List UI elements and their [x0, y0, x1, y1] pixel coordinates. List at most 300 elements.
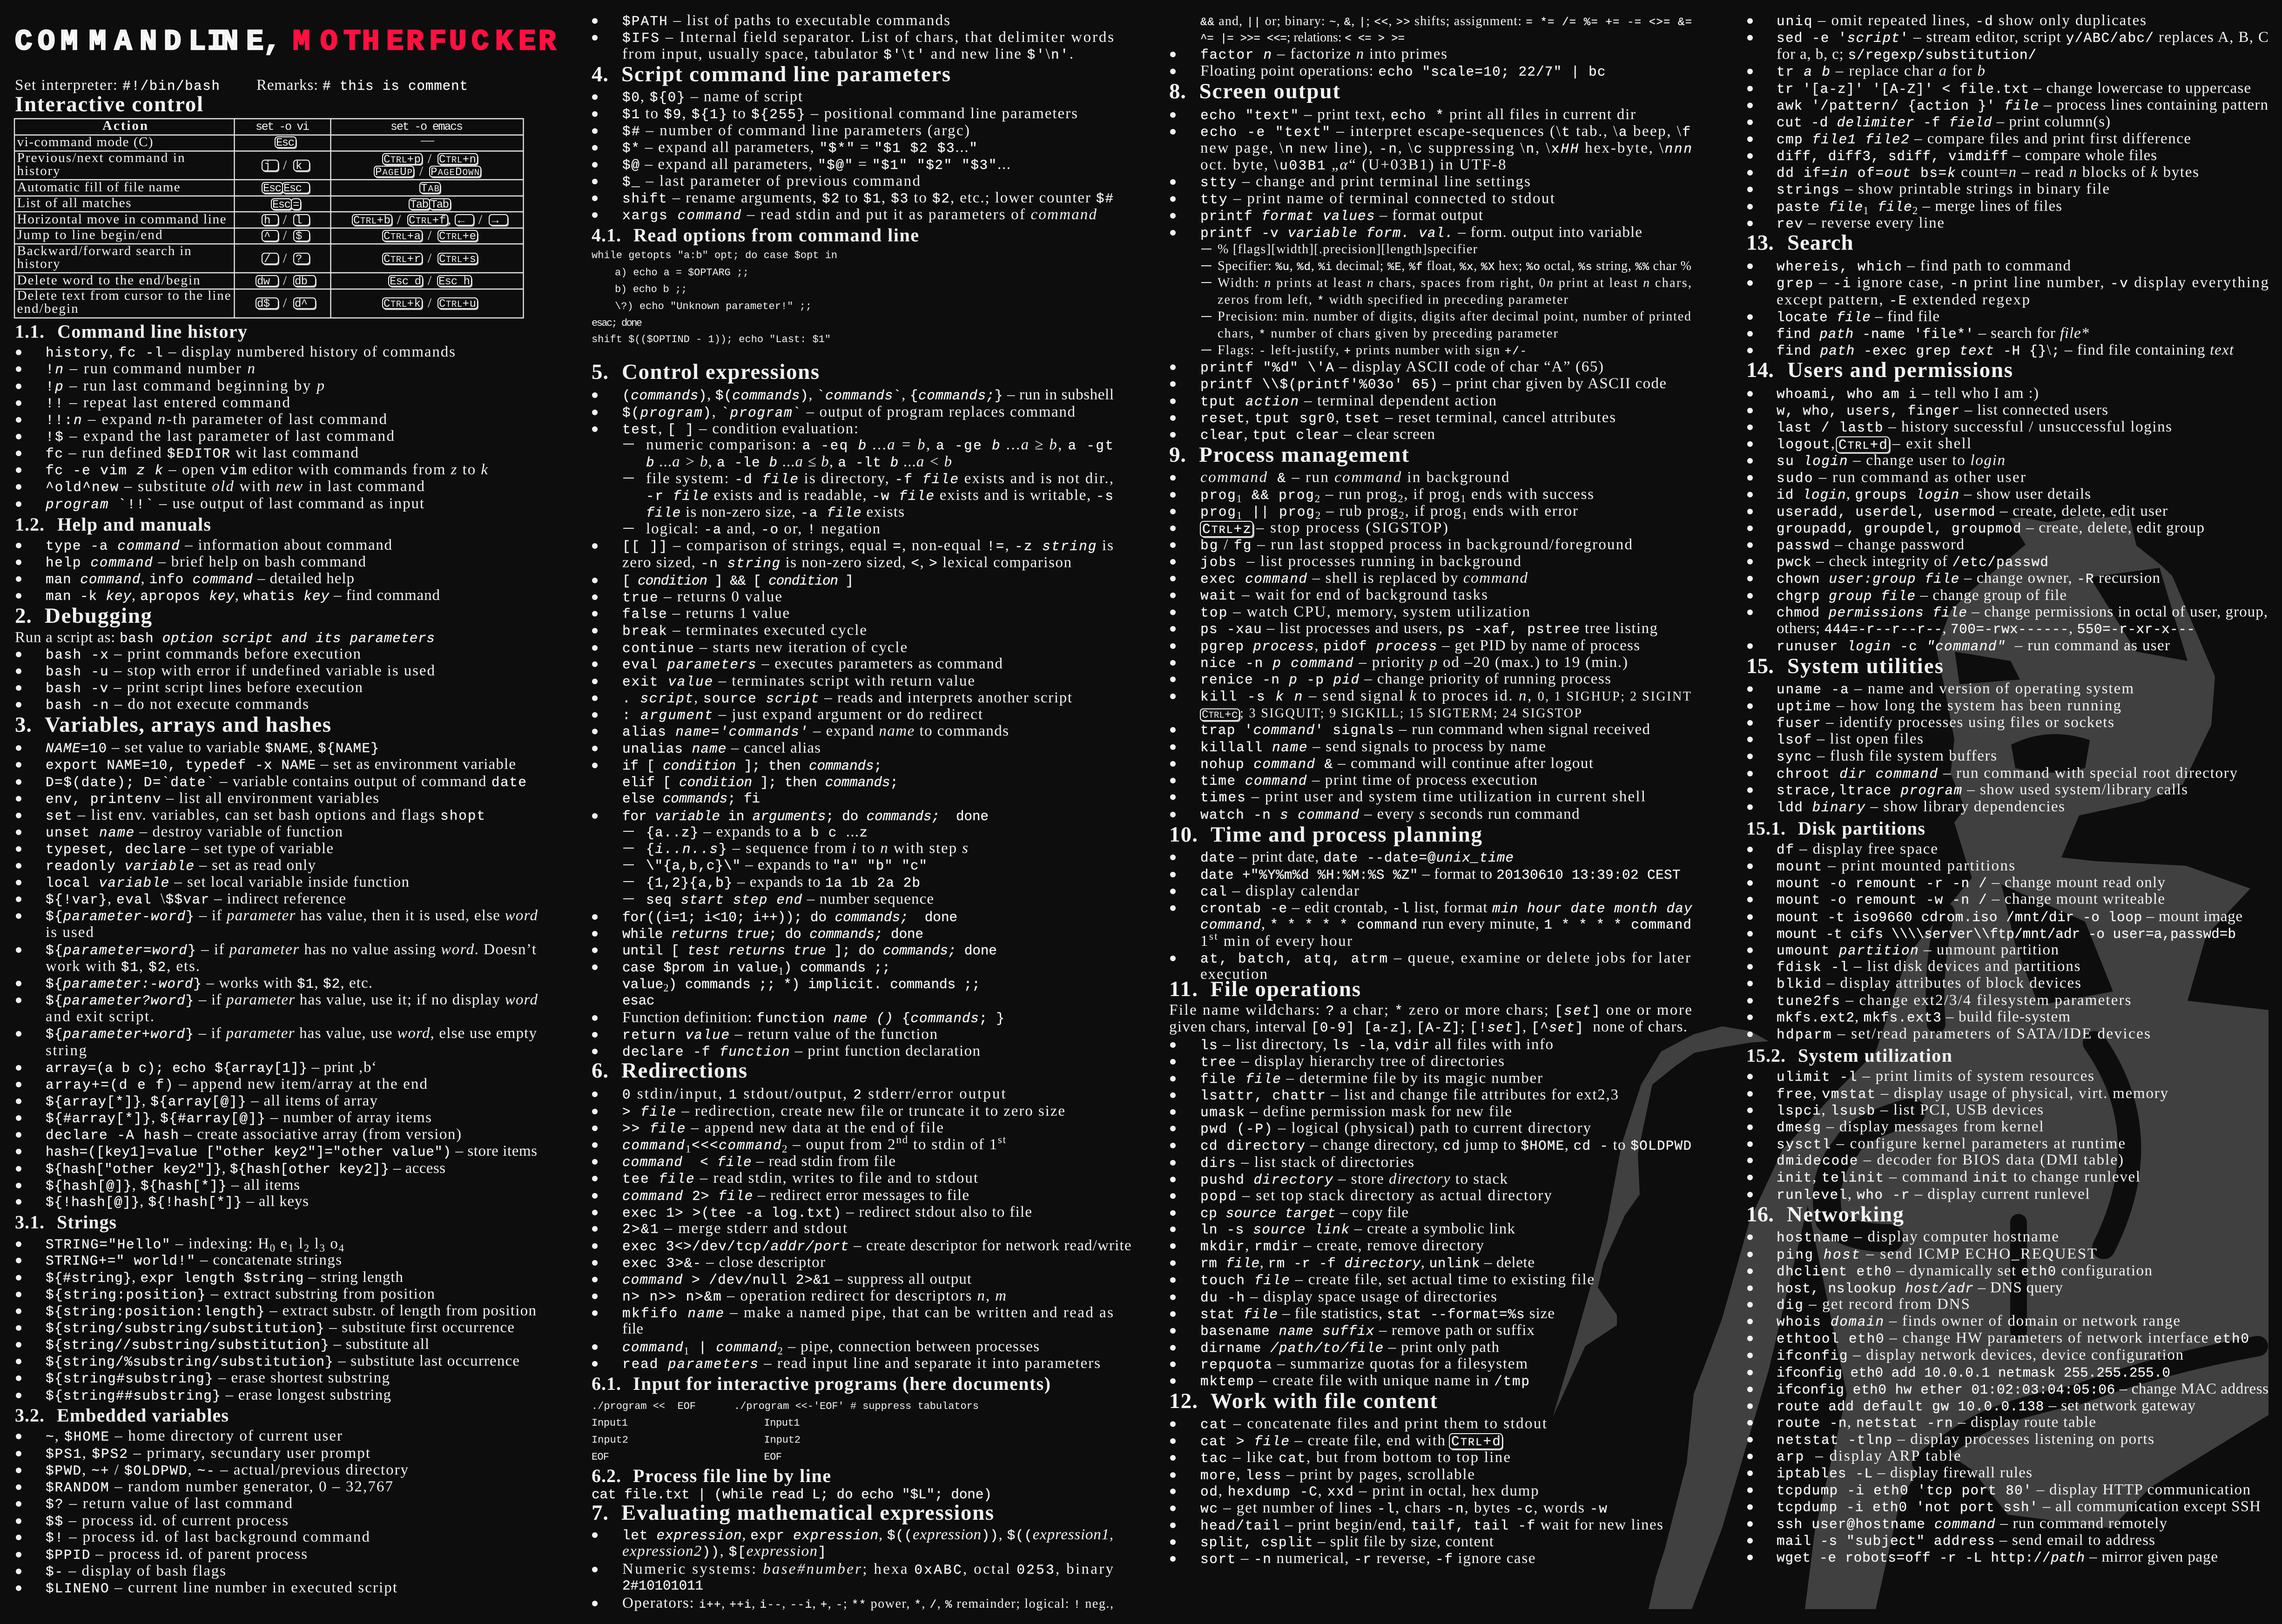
list: control expressions: case $prom in value1) commands ;; — [622, 960, 890, 977]
table: interactive control keys: vi-command mode (C) — [17, 135, 153, 149]
list: file operations: basename name suffix – remove path or suffix — [1200, 1322, 1535, 1339]
list: redirections: n> n>> n>&m – operation redirect for descriptors n, m — [622, 1287, 1006, 1305]
list: screen output: reset, tput sgr0, tset – reset terminal, cancel attributes — [1200, 409, 1616, 426]
list: system utilization: sysctl – configure kernel parameters at runtime — [1777, 1135, 2125, 1152]
list: variables: ${hash["other key2"]}, ${hash[other key2]} – access — [46, 1160, 445, 1177]
list: file content continued: tr a b – replace char a for b — [1777, 62, 1985, 80]
list: math expressions — [592, 1526, 1113, 1611]
list: help commands — [16, 537, 440, 604]
list: file content continued: awk '/pattern/ {action }' file – process lines containing pattern — [1777, 97, 2268, 114]
list: system utilization: init, telinit – command init to change runlevel — [1777, 1169, 2140, 1186]
table: interactive control keys: history — [17, 256, 60, 271]
list: users: passwd – change password — [1777, 536, 1964, 553]
list: screen output: printf \\$(printf'%03o' 65) – print char given by ASCII code — [1200, 375, 1666, 392]
list: embedded variables continued: $IFS – Internal field separator. List of chars, that delimiter words — [622, 29, 1114, 46]
list: embedded variables: $? – return value of last command — [46, 1495, 292, 1512]
list: system utilization: ulimit -l – print limits of system resources — [1777, 1068, 2094, 1085]
code block: getopts — [592, 250, 837, 345]
list: screen output: printf format values – format output — [1200, 207, 1483, 224]
list: file content continued: diff, diff3, sdiff, vimdiff – compare whole files — [1777, 147, 2157, 164]
code block: here documents: ./program <<-'EOF' # suppress tabulators — [734, 1401, 979, 1412]
column 4 — [1746, 12, 2269, 1566]
heading 3.1 — [15, 1212, 116, 1233]
list: system utilities: chroot dir command – run command with special root directory — [1777, 765, 2238, 782]
list: process management: bg / fg – run last stopped process in background/foreground — [1200, 536, 1633, 553]
section 15.1 disk partitions — [1746, 818, 2242, 1043]
list: process management: trap 'command' signals – run command when signal received — [1200, 721, 1650, 738]
list: search: find path -name 'file*' – search for file* — [1777, 325, 2089, 342]
list: redirections: > file – redirection, create new file or truncate it to zero size — [622, 1103, 1065, 1120]
list: redirections: exec 3>&- – close descriptor — [622, 1254, 825, 1271]
section 3.1 strings — [15, 1212, 536, 1404]
list: process management: exec command – shell is replaced by command — [1200, 570, 1528, 587]
table: interactive control keys: Jump to line begin/end — [17, 227, 162, 242]
list: users: w, who, users, finger – list connected users — [1777, 402, 2108, 419]
list: networking — [1747, 1228, 2269, 1566]
list: networking: wget -e robots=off -r -L http://path – mirror given page — [1777, 1549, 2218, 1566]
table: interactive control keys: Esc — [283, 182, 302, 195]
heading 7: 7. — [592, 1501, 608, 1525]
heading 6.2: 6.2. — [592, 1465, 621, 1486]
table: interactive control keys: CTRL+n — [439, 154, 476, 166]
list: help commands: type -a command – information about command — [46, 537, 392, 554]
table: interactive control keys: Automatic fill of file name — [17, 180, 180, 195]
list: process management: ps -xau – list processes and users, ps -xaf, pstree tree listing — [1200, 620, 1657, 637]
list: planning: date – print date, date --date=@unix_time — [1200, 849, 1514, 866]
table: interactive control keys: PAGEDOWN — [431, 166, 479, 179]
list: process management: CTRL+c — [1202, 709, 1238, 721]
interpreter and remarks line: Set interpreter: #!/bin/bash — [15, 77, 220, 94]
list: screen output: chars, * number of chars given by preceding parameter — [1218, 326, 1558, 341]
list: file content: split, csplit – split file by size, content — [1200, 1533, 1494, 1550]
heading 12: 12. — [1169, 1389, 1198, 1413]
list: redirections: exec 1> >(tee -a log.txt) – redirect stdout also to file — [622, 1204, 1032, 1221]
table: interactive control keys: Esc — [263, 182, 282, 195]
list: control expressions: else commands; fi — [622, 791, 760, 807]
list: screen output: printf "%d" \'A – display ASCII code of char “A” (65) — [1200, 358, 1603, 376]
code block: here documents: Input1 — [592, 1417, 628, 1429]
list: networking: tcpdump -i eth0 'tcp port 80' – display HTTP communication — [1777, 1481, 2250, 1499]
list: file operations: repquota – summarize quotas for a filesystem — [1200, 1355, 1528, 1373]
list: networking: dig – get record from DNS — [1777, 1296, 1970, 1313]
list: math expressions continued — [1170, 14, 1692, 80]
heading 10: 10. — [1169, 822, 1198, 847]
list: history commands: !p – run last command beginning by p — [46, 377, 324, 395]
list: system utilization — [1747, 1068, 2168, 1203]
list: users: CTRL+d — [1838, 438, 1887, 453]
list: file content: head/tail – print begin/end, tailf, tail -f wait for new lines — [1200, 1516, 1663, 1534]
list: embedded variables continued: from input, usually space, tabulator $'\t' and new line $'\n'. — [622, 46, 1073, 63]
list: file content: sort – -n numerical, -r reverse, -f ignore case — [1200, 1550, 1535, 1567]
list: planning: command, * * * * * command run every minute, 1 * * * * command — [1200, 916, 1691, 933]
table: interactive control keys: ^ — [264, 230, 270, 243]
section 4.1 read options — [592, 224, 919, 345]
list: file content continued: cmp file1 file2 – compare files and print first difference — [1777, 130, 2191, 148]
list: embedded variables continued: $PATH – list of paths to executable commands — [622, 12, 950, 29]
list: users: chown user:group file – change owner, -R recursion — [1777, 570, 2160, 587]
table: interactive control keys: PAGEUP — [375, 166, 412, 179]
list: embedded variables: ~, $HOME – home directory of current user — [46, 1428, 342, 1445]
list: control expressions: : argument – just expand argument or do redirect — [622, 706, 983, 723]
table: interactive control keys: Esc h — [438, 276, 470, 288]
list: control expressions: for variable in arguments; do commands; done — [622, 809, 989, 824]
list: disk partitions: df – display free space — [1777, 841, 1938, 858]
table: interactive control keys: Delete text from cursor to the line — [17, 288, 231, 303]
table: interactive control keys: ← — [458, 215, 465, 227]
table: interactive control keys: Horizontal move in command line — [17, 212, 226, 227]
list: users: id login, groups login – show user details — [1777, 486, 2091, 503]
list: search: except pattern, -E extended regexp — [1777, 291, 2030, 309]
list: variables: unset name – destroy variable of function — [46, 823, 343, 841]
heading 16: 16. — [1746, 1202, 1774, 1226]
heading: interactive control: Interactive control — [15, 92, 203, 116]
table: interactive control keys: / — [283, 273, 287, 288]
list: variables: NAME=10 – set value to variable $NAME, ${NAME} — [46, 739, 379, 756]
list: control expressions: file is non-zero size, -a file exists — [646, 504, 904, 521]
section 14 users and permissions — [1746, 358, 2268, 654]
table: interactive control keys: CTRL+b — [353, 215, 390, 227]
list: redirections: command > /dev/null 2>&1 – suppress all output — [622, 1271, 971, 1288]
list: variables: and exit script. — [46, 1008, 154, 1025]
list: file content continued: paste file1 file2 – merge lines of files — [1777, 198, 2062, 216]
list: file operations: dirs – list stack of directories — [1200, 1154, 1414, 1171]
list: networking: route -n, netstat -rn – display route table — [1777, 1414, 2096, 1431]
list: variables: ${parameter?word} – if parameter has value, use it; if no display word — [46, 991, 538, 1009]
heading 15.2: 15.2. — [1746, 1045, 1785, 1066]
list: screen output: % [flags][width][.precision][length]specifier — [1218, 242, 1478, 256]
list: networking: tcpdump -i eth0 'not port ssh' – all communication except SSH — [1777, 1498, 2261, 1516]
heading 13 — [1746, 231, 1853, 255]
list: system utilities: strace,ltrace program – show used system/library calls — [1777, 781, 2188, 799]
list: file operations: stat file – file statistics, stat --format=%s size — [1200, 1305, 1555, 1322]
list: users: – exit shell — [1892, 435, 1971, 452]
list: screen output: oct. byte, \u03B1 „α“ (U+03B1) in UTF-8 — [1200, 156, 1506, 174]
list: strings: ${string/%substring/substitution} – substitute last occurrence — [46, 1353, 519, 1370]
table: interactive control keys: l — [296, 215, 302, 227]
list: file content continued: uniq – omit repeated lines, -d show only duplicates — [1777, 12, 2146, 29]
list: variables: ${hash[@]}, ${hash[*]} – all items — [46, 1177, 300, 1194]
section 15.2 system utilization — [1746, 1045, 2168, 1203]
list: process management: wait – wait for end of background tasks — [1200, 586, 1488, 604]
list: screen output: Precision: min. number of digits, digits after decimal point, number of printed — [1218, 310, 1691, 324]
list: embedded variables: $PWD, ~+ / $OLDPWD, ~- – actual/previous directory — [46, 1462, 409, 1479]
table: interactive control keys: j — [264, 160, 270, 173]
heading 15.1: 15.1. — [1746, 818, 1785, 839]
table: interactive control keys: set -o emacs — [390, 120, 463, 134]
list: parameters: $# – number of command line parameters (argc) — [622, 122, 969, 140]
list: screen output: Width: n prints at least n chars, spaces from right, 0n print at least n chars, — [1218, 276, 1691, 290]
table: interactive control keys: / — [283, 296, 287, 310]
list: control expressions — [592, 386, 1114, 1060]
section 11 file operations — [1169, 977, 1692, 1389]
list: networking: mail -s "subject" address – send email to address — [1777, 1532, 2155, 1549]
list: users — [1747, 385, 2268, 654]
list: variables: is used — [46, 924, 94, 941]
list: disk partitions: fdisk -l – list disk devices and partitions — [1777, 958, 2080, 975]
heading 6.2: Process file line by line — [633, 1465, 831, 1486]
list: networking: ethtool eth0 – change HW parameters of network interface eth0 — [1777, 1329, 2249, 1347]
table: interactive control keys: CTRL+u — [439, 298, 476, 310]
list: parameters: $* – expand all parameters, "$*" = "$1 $2 $3..." — [622, 139, 977, 156]
table: interactive control keys: ? — [296, 253, 302, 266]
wildcards text block: File name wildchars: ? a char; * zero or more chars; [set] one or more — [1169, 1002, 1692, 1019]
table: interactive control keys: / — [283, 212, 287, 227]
list: control expressions: seq start step end – number sequence — [646, 891, 934, 908]
intro text: Run a script as: bash option script and its parameters — [15, 629, 435, 646]
list: file operations: touch file – create file, set actual time to existing file — [1200, 1271, 1594, 1288]
list: process management: watch -n s command – every s seconds run command — [1200, 806, 1580, 823]
code block: here documents: Input1 — [764, 1417, 800, 1429]
list: networking: ifconfig eth0 add 10.0.0.1 netmask 255.255.255.0 — [1777, 1366, 2170, 1381]
list: math expressions: let expression, expr expression, $((expression)), $((expression1, — [622, 1526, 1113, 1543]
table: interactive control keys: CTRL+r — [384, 253, 421, 266]
list: networking: iptables -L – display firewall rules — [1777, 1464, 2032, 1482]
heading 7: Evaluating mathematical expressions — [621, 1501, 994, 1525]
list: control expressions: Function definition: function name () {commands; } — [622, 1009, 1004, 1026]
table: interactive control keys: CTRL+k — [384, 298, 421, 310]
list: process management: times – print user and system time utilization in current shell — [1200, 788, 1645, 805]
heading 5: 5. — [592, 360, 608, 384]
heading 14: Users and permissions — [1787, 358, 2013, 382]
list: help commands: help command – brief help on bash command — [46, 553, 366, 571]
list: file operations: umask – define permission mask for new file — [1200, 1103, 1512, 1120]
list: search: find path -exec grep text -H {}\; – find file containing text — [1777, 342, 2234, 359]
list: screen output: Specifier: %u, %d, %i decimal; %E, %f float, %x, %X hex; %o octal, %s string, %% char % — [1218, 259, 1691, 274]
heading 8: 8. — [1169, 79, 1186, 103]
list: history commands — [16, 344, 488, 512]
heading 2: Debugging — [45, 604, 152, 628]
section 13 search — [1746, 231, 2269, 359]
code line: cat file.txt | (while read L; do echo "$L"; done) — [592, 1487, 992, 1503]
heading 6: Redirections — [621, 1058, 747, 1083]
list: file content: wc – get number of lines -l, chars -n, bytes -c, words -w — [1200, 1500, 1607, 1517]
list: variables: hash=([key1]=value ["other key2"]="other value") – store items — [46, 1143, 537, 1160]
section 9 process management — [1169, 443, 1691, 823]
list: file operations: tree – display hierarchy tree of directories — [1200, 1053, 1504, 1070]
interpreter and remarks line: Remarks: # this is comment — [256, 77, 468, 94]
section 15 system utilities — [1746, 654, 2238, 815]
table: interactive control keys: = — [293, 199, 299, 211]
list: file content continued: for a, b, c; s/regexp/substitution/ — [1777, 46, 2036, 63]
table: interactive control keys: → — [492, 215, 499, 227]
list: parameters: $0, ${0} – name of script — [622, 88, 802, 105]
list: control expressions: {1,2}{a,b} – expands to 1a 1b 2a 2b — [646, 874, 920, 891]
list: control expressions: false – returns 1 value — [622, 605, 789, 622]
list: control expressions: {a..z} – expands to a b c ...z — [646, 823, 868, 841]
list: networking: route add default gw 10.0.0.138 – set network gateway — [1777, 1397, 2196, 1415]
table: interactive control keys: Tab — [410, 199, 429, 211]
table: interactive control keys: / — [283, 228, 287, 243]
list: parameters — [592, 88, 1113, 223]
list: redirections: read parameters – read input line and separate it into parameters — [622, 1355, 1100, 1372]
list: embedded variables: $PPID – process id. of parent process — [46, 1546, 307, 1563]
table: interactive control keys: d^ — [295, 298, 308, 310]
list: networking: dhclient eth0 – dynamically set eth0 configuration — [1777, 1262, 2152, 1280]
list: users: sudo – run command as other user — [1777, 469, 2026, 486]
table: interactive control keys: $ — [296, 230, 302, 243]
list: system utilities: uptime – how long the system has been running — [1777, 697, 2121, 714]
list: networking: ping host – send ICMP ECHO_REQUEST — [1777, 1246, 2097, 1263]
table: interactive control keys: / — [428, 296, 432, 310]
wildcards text block: given chars, interval [0-9] [a-z], [A-Z]; [!set], [^set] none of chars. — [1169, 1018, 1687, 1036]
section 2 debugging — [15, 604, 435, 713]
code block: getopts: \?) echo "Unknown parameter!" ;; — [615, 301, 812, 312]
list: screen output: stty – change and print terminal line settings — [1200, 173, 1530, 190]
list: control expressions: test, [ ] – condition evaluation: — [622, 420, 858, 438]
list: system utilities: sync – flush file system buffers — [1777, 748, 1997, 765]
section 6.1 input for interactive programs — [592, 1373, 1050, 1463]
heading 3: 3. — [15, 713, 32, 737]
list: control expressions: {i..n..s} – sequence from i to n with step s — [646, 840, 968, 857]
heading 15: 15. — [1746, 654, 1774, 678]
list: users: whoami, who am i – tell who I am :) — [1777, 385, 2039, 402]
heading 9: 9. — [1169, 443, 1186, 467]
list: redirections: command1<<<command2 – ouput from 2nd to stdin of 1st — [622, 1134, 1006, 1155]
list: networking: hostname – display computer hostname — [1777, 1228, 2059, 1246]
list: history commands: history, fc -l – display numbered history of commands — [46, 344, 455, 361]
list: control expressions: unalias name – cancel alias — [622, 740, 821, 757]
list: disk partitions: mount -t iso9660 cdrom.iso /mnt/dir -o loop – mount image — [1777, 908, 2242, 925]
heading 1.2: 1.2. — [15, 514, 44, 535]
list: system utilities — [1747, 680, 2238, 815]
list: parameters: $@ – expand all parameters, "$@" = "$1" "$2" "$3"... — [622, 156, 1010, 173]
list: users: useradd, userdel, usermod – create, delete, edit user — [1777, 503, 2168, 520]
list: disk partitions — [1747, 841, 2242, 1043]
list: strings: ${string//substring/substitution} – substitute all — [46, 1336, 429, 1353]
list: strings: ${string##substring} – erase longest substring — [46, 1387, 391, 1404]
heading 3.1: 3.1. — [15, 1212, 44, 1233]
code block: here documents: Input2 — [764, 1435, 801, 1446]
list: planning: at, batch, atq, atrm – queue, examine or delete jobs for later — [1200, 950, 1690, 967]
table: interactive control keys — [14, 118, 523, 318]
list: control expressions: for((i=1; i<10; i++)); do commands; done — [622, 910, 957, 925]
list: planning: crontab -e – edit crontab, -l list, format min hour date month day — [1200, 899, 1693, 916]
list: control expressions: \"{a,b,c}\" – expands to "a" "b" "c" — [646, 856, 927, 874]
list: file content continued: rev – reverse every line — [1777, 215, 1944, 232]
list: variables: env, printenv – list all environment variables — [46, 790, 379, 807]
heading 13: 13. — [1746, 231, 1774, 255]
list: system utilization: free, vmstat – display usage of physical, virt. memory — [1777, 1085, 2168, 1102]
list: planning: 1st min of every hour — [1200, 930, 1352, 950]
table: interactive control keys: / — [397, 212, 401, 227]
list: control expressions: file system: -d file is directory, -f file exists and is not dir., — [646, 470, 1113, 487]
title: COMMANDLINE, — [15, 25, 281, 58]
table: interactive control keys: CTRL+a — [384, 230, 421, 243]
list: parameters: shift – rename arguments, $2 to $1, $3 to $2, etc.; lower counter $# — [622, 189, 1113, 207]
heading 1.1: 1.1. — [15, 321, 44, 342]
list: variables: set – list env. variables, can set bash options and flags shopt — [46, 807, 485, 824]
list: screen output: echo -e "text" – interpret escape-sequences (\t tab., \a beep, \f — [1200, 123, 1690, 140]
list: redirections: mkfifo name – make a named pipe, that can be written and read as — [622, 1304, 1113, 1321]
list: history commands: !! – repeat last entered command — [46, 394, 290, 411]
list: control expressions: exit value – terminates script with return value — [622, 673, 975, 690]
list: math expressions: Numeric systems: base#number; hexa 0xABC, octal 0253, binary — [622, 1561, 1113, 1578]
table: interactive control keys: / — [264, 253, 270, 266]
list: variables: array+=(d e f) – append new item/array at the end — [46, 1076, 427, 1093]
list: search: locate file – find file — [1777, 308, 1939, 325]
list: screen output: zeros from left, * width specified in preceding parameter — [1218, 292, 1568, 307]
list: process management: nohup command & – command will continue after logout — [1200, 755, 1593, 772]
list: screen output: echo "text" – print text, echo * print all files in current dir — [1200, 106, 1636, 123]
list: strings: STRING="Hello" – indexing: H0 e1 l2 l3 o4 — [46, 1235, 344, 1254]
list: process management: prog1 && prog2 – run prog2, if prog1 ends with success — [1200, 486, 1594, 505]
table: interactive control keys: set -o vi — [256, 120, 310, 134]
list: variables: ${array[*]}, ${array[@]} – all items of array — [46, 1092, 378, 1110]
list: users: chgrp group file – change group of file — [1777, 587, 2067, 604]
list: networking: arp – display ARP table — [1777, 1448, 1960, 1465]
list: screen output: new page, \n new line), -n, \c suppressing \n, \xHH hex-byte, \nnn — [1200, 140, 1692, 157]
list: disk partitions: mount -o remount -w -n / – change mount writeable — [1777, 891, 2165, 908]
list: control expressions: until [ test returns true ]; do commands; done — [622, 943, 997, 959]
list: networking: netstat -tlnp – display processes listening on ports — [1777, 1431, 2154, 1448]
list: file content continued: cut -d delimiter -f field – print column(s) — [1777, 114, 2110, 131]
list: strings: ${#string}, expr length $string – string length — [46, 1269, 403, 1286]
list: math expressions continued: ^= |= >>= <<=; relations: < <= > >= — [1200, 30, 1405, 45]
list: variables: ${parameter:-word} – works with $1, $2, etc. — [46, 975, 372, 992]
list: process management: renice -n p -p pid – change priority of running process — [1200, 670, 1611, 688]
list: planning — [1170, 849, 1693, 983]
list: control expressions: zero sized, -n string is non-zero sized, <, > lexical comparison — [622, 554, 1071, 572]
heading 3: Variables, arrays and hashes — [45, 713, 331, 737]
list: control expressions: esac — [622, 993, 654, 1009]
heading 5: Control expressions — [622, 360, 819, 384]
heading 11: 11. — [1169, 977, 1198, 1001]
table: interactive control keys: end/begin — [17, 301, 78, 316]
list: system utilities: uname -a – name and version of operating system — [1777, 680, 2134, 697]
list: control expressions: value2) commands ;; *) implicit. commands ;; — [622, 977, 980, 994]
table: interactive control keys: history — [17, 163, 60, 178]
list: control expressions: [ condition ] && [ condition ] — [622, 573, 854, 589]
list: strings: ${string:position:length} – extract substr. of length from position — [46, 1302, 536, 1320]
list: control expressions: declare -f function – print function declaration — [622, 1043, 980, 1060]
column 2 — [592, 12, 1131, 1611]
heading 13: Search — [1787, 231, 1853, 255]
list: users: logout, — [1777, 435, 1835, 452]
list: planning: execution — [1200, 966, 1267, 983]
heading 3.2: 3.2. — [15, 1405, 44, 1426]
table: interactive control keys: Delete word to the end/begin — [17, 273, 200, 288]
code block: here documents: EOF — [592, 1451, 609, 1463]
list: file operations: pushd directory – store directory to stack — [1200, 1171, 1508, 1188]
list: redirections: 2>&1 – merge stderr and stdout — [622, 1220, 847, 1237]
heading 14: 14. — [1746, 358, 1774, 382]
list: process management: – stop process (SIGSTOP) — [1256, 519, 1448, 536]
list: control expressions: [[ ]] – comparison of strings, equal =, non-equal !=, -z string is — [622, 537, 1113, 554]
list: networking: ifconfig eth0 hw ether 01:02:03:04:05:06 – change MAC address — [1777, 1381, 2269, 1398]
heading 9: Process management — [1199, 443, 1409, 467]
list: search: grep – -i ignore case, -n print line number, -v display everything — [1777, 274, 2269, 291]
table: interactive control keys: TAB — [421, 182, 439, 195]
list: history commands: !n – run command number n — [46, 360, 255, 377]
table: interactive control keys: / — [283, 158, 287, 173]
code block: here documents: Input2 — [592, 1435, 628, 1446]
list: embedded variables: $- – display of bash flags — [46, 1563, 226, 1580]
background silhouette of figure — [1553, 515, 2269, 1609]
section 8 screen output — [1169, 79, 1692, 443]
table: interactive control keys: Previous/next command in — [17, 150, 185, 165]
code block: getopts: a) echo a = $OPTARG ;; — [615, 267, 749, 278]
list: users: chmod permissions file – change permissions in octal of user, group, — [1777, 603, 2268, 621]
list: embedded variables — [16, 1428, 409, 1597]
list: variables: ${!var}, eval \$$var – indirect reference — [46, 890, 346, 908]
list: variables — [16, 739, 538, 1210]
list: file operations — [1170, 1036, 1691, 1389]
list: file operations: cp source target – copy file — [1200, 1204, 1408, 1221]
table: interactive control keys: / — [478, 212, 483, 227]
section 1.2 help and manuals — [15, 514, 440, 604]
list: variables: D=$(date); D=`date` – variable contains output of command date — [46, 773, 526, 790]
list: control expressions: break – terminates executed cycle — [622, 622, 867, 639]
